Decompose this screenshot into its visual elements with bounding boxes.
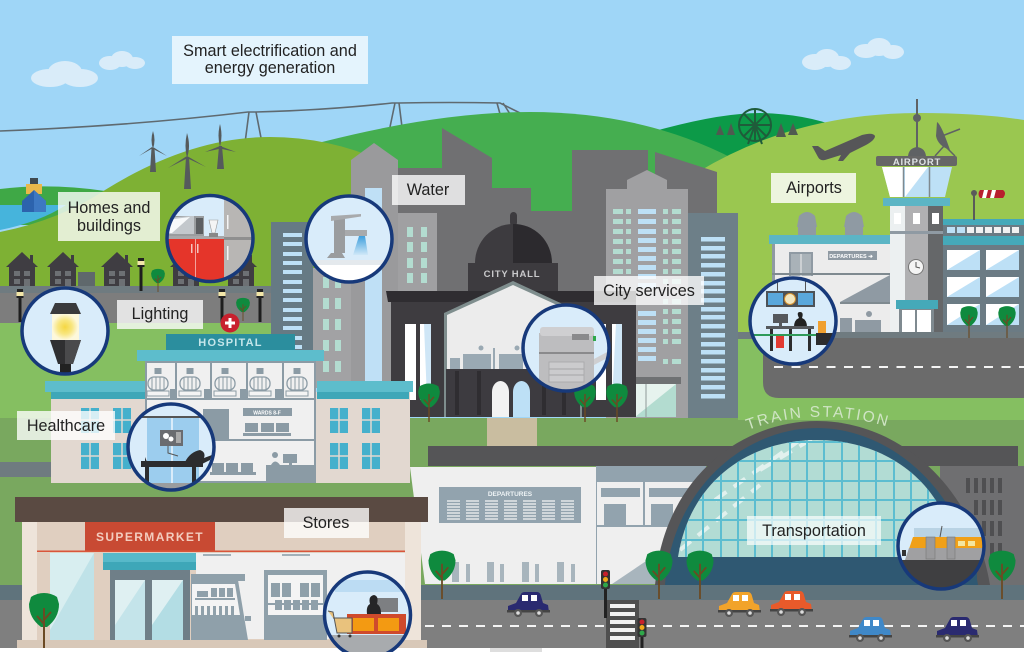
supermarket sign: [85, 522, 215, 552]
ship: [22, 178, 46, 212]
tower: lower grey: [313, 268, 351, 388]
icon circle: checkout: [323, 571, 412, 652]
hospital sign: HOSPITAL: [198, 337, 263, 349]
ground lower bands: [0, 418, 1024, 588]
label: airports: Airports: [786, 179, 842, 197]
label: smart electrification: Smart electrification and: [183, 42, 357, 60]
airport road: [738, 332, 1024, 398]
supermarket sign: SUPERMARKET: [96, 530, 204, 544]
red cross marker: [220, 314, 240, 332]
hospital sign: [166, 334, 295, 350]
bottom streets: [0, 585, 1024, 648]
label: stores: [284, 508, 369, 538]
hill: far left: [0, 186, 105, 225]
station trees: [428, 551, 1016, 599]
street behind houses: [0, 286, 275, 477]
hill: centre: [322, 112, 745, 240]
wind turbines: [139, 124, 236, 189]
label: lighting: Lighting: [132, 305, 188, 323]
airport right block: [943, 219, 1024, 332]
label: lighting: [117, 300, 203, 329]
label: transportation: Transportation: [762, 522, 866, 540]
cars: [507, 591, 979, 642]
ground right green: [738, 338, 1024, 420]
train station sign: TRAIN STATION: [744, 406, 888, 429]
ground left green: [0, 322, 300, 480]
label: transportation: [747, 516, 881, 545]
label: healthcare: Healthcare: [27, 417, 105, 435]
departures sign airport: DEPARTURES ➔: [829, 254, 873, 260]
bottom white strip: [0, 648, 1024, 652]
label: city services: [594, 276, 704, 305]
label: homes and buildings: Homes and: [68, 199, 150, 217]
departures board text: DEPARTURES: [488, 491, 533, 498]
airport trees: [960, 306, 1016, 338]
crosswalk: [606, 600, 639, 648]
windsock: [971, 190, 1005, 220]
hill: left olive: [0, 137, 405, 320]
tower: blue-grey left: [271, 222, 313, 382]
clouds: [31, 38, 904, 87]
supermarket tree: [29, 593, 59, 648]
city hall trees: [418, 384, 628, 422]
label: smart electrification: [172, 36, 368, 84]
label: airports: [771, 173, 856, 203]
label: city services: City services: [603, 282, 695, 300]
hospital: [45, 334, 413, 483]
radar dish: [935, 122, 960, 156]
train station back bar: [428, 446, 1018, 466]
city hall sign: CITY HALL: [484, 269, 540, 280]
tower: small grey with green windows: [398, 213, 437, 293]
hill: right light green: [698, 113, 1024, 345]
supermarket: [15, 497, 428, 648]
airport terminal: [769, 212, 891, 332]
icon circle: patient on bed: [127, 403, 215, 493]
icon circle: street lamp: [21, 287, 109, 376]
ferris wheel and trees on far hill: [716, 109, 798, 144]
icon circle: kitchen: [165, 194, 255, 284]
train station side hall: [596, 466, 706, 584]
power line with pylons: [0, 102, 520, 143]
icon circle: photocopier: [522, 304, 610, 392]
label: water: [392, 175, 465, 205]
hill: far right with ferris wheel: [655, 113, 838, 168]
upper street lamp and tree: [138, 258, 165, 292]
train station departures hall: [410, 467, 596, 584]
label: healthcare: [17, 411, 115, 440]
tower: left grey with blue strip: [351, 143, 398, 408]
tower: blue-grey right: [688, 213, 738, 418]
train station right block: [940, 466, 1024, 586]
label: homes and buildings: [58, 192, 160, 241]
airplane: [812, 134, 875, 161]
water: left bay: [0, 205, 66, 230]
label: stores: Stores: [303, 514, 349, 532]
city hall: [386, 212, 636, 417]
control tower: [876, 99, 957, 332]
label: homes and buildings: buildings: [77, 217, 141, 235]
airport sign: AIRPORT: [893, 157, 941, 168]
traffic lights: [601, 570, 646, 652]
tower: tall grey right: [606, 170, 688, 418]
icon circle: train: [897, 502, 985, 592]
icon circle: water tap: [305, 195, 393, 286]
lower street lamps and tree: [16, 289, 264, 322]
city hall walkway: [487, 418, 537, 446]
label: smart electrification: energy generation: [205, 59, 335, 77]
skyline silhouette: [380, 128, 717, 300]
train station arch: [655, 421, 990, 585]
icon circle: airport desk: [749, 277, 840, 365]
label: water: Water: [407, 181, 450, 199]
hospital: WARDS 8-F: [253, 410, 281, 416]
houses: [6, 252, 257, 291]
